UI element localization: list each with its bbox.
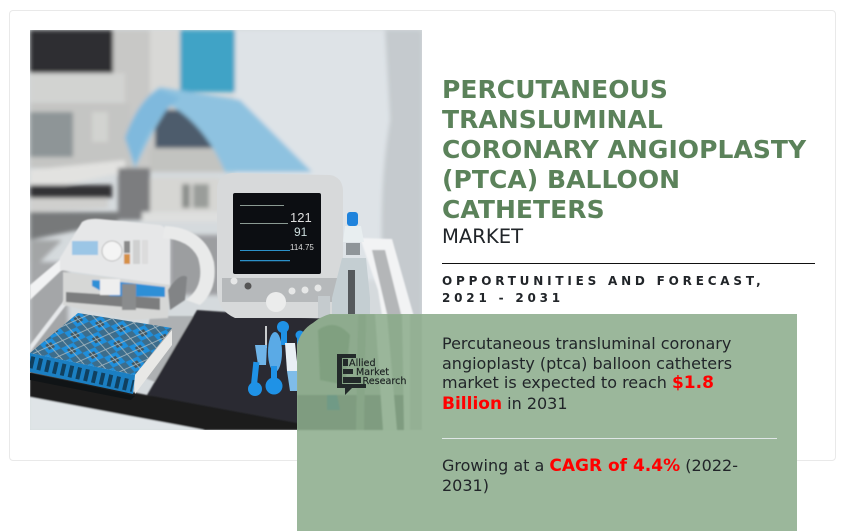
background wall and equipment bbox=[30, 30, 422, 352]
photo: medical equipment on a tray bbox=[30, 30, 422, 430]
syringes bbox=[248, 321, 304, 396]
tray surface bbox=[30, 238, 422, 430]
forecast heading: 2021 - 2031 bbox=[442, 291, 564, 305]
patient monitor: 121 bbox=[290, 210, 312, 225]
panel divider bbox=[442, 438, 777, 439]
overlay panel bbox=[297, 314, 797, 531]
market value text bbox=[442, 334, 732, 414]
title: PERCUTANEOUS bbox=[442, 75, 668, 104]
patient monitor: 91 bbox=[294, 225, 308, 239]
logo: Allied Market Research: Research bbox=[362, 376, 407, 387]
heading rule bbox=[442, 263, 815, 264]
market value text: market is expected to reach $1.8 bbox=[442, 373, 714, 393]
market value text: angioplasty (ptca) balloon catheters bbox=[442, 354, 732, 373]
logo: Allied Market Research: Market bbox=[356, 367, 389, 378]
translucent photo show-through bbox=[297, 314, 404, 430]
title: TRANSLUMINAL bbox=[442, 105, 663, 134]
CAGR text: 2031) bbox=[442, 476, 489, 495]
title: (PTCA) BALLOON bbox=[442, 165, 680, 194]
infusion pump bbox=[60, 219, 215, 320]
forecast heading bbox=[442, 274, 764, 305]
logo: Allied Market Research: Allied bbox=[349, 358, 376, 369]
title bbox=[442, 75, 806, 224]
logo: Allied Market Research bbox=[337, 354, 407, 395]
CAGR text: Growing at a CAGR of 4.4% (2022- bbox=[442, 456, 738, 476]
subtitle: market: MARKET bbox=[442, 225, 523, 248]
patient monitor bbox=[217, 173, 343, 318]
title: CORONARY ANGIOPLASTY bbox=[442, 135, 806, 164]
market value text: Percutaneous transluminal coronary bbox=[442, 334, 731, 353]
forecast heading: OPPORTUNITIES AND FORECAST, bbox=[442, 274, 764, 288]
CAGR text bbox=[442, 456, 738, 495]
title: CATHETERS bbox=[442, 195, 605, 224]
bottle bbox=[318, 212, 370, 320]
patient monitor: 114.75 bbox=[290, 243, 314, 252]
notebook bbox=[30, 313, 172, 400]
market value text: Billion in 2031 bbox=[442, 394, 568, 414]
